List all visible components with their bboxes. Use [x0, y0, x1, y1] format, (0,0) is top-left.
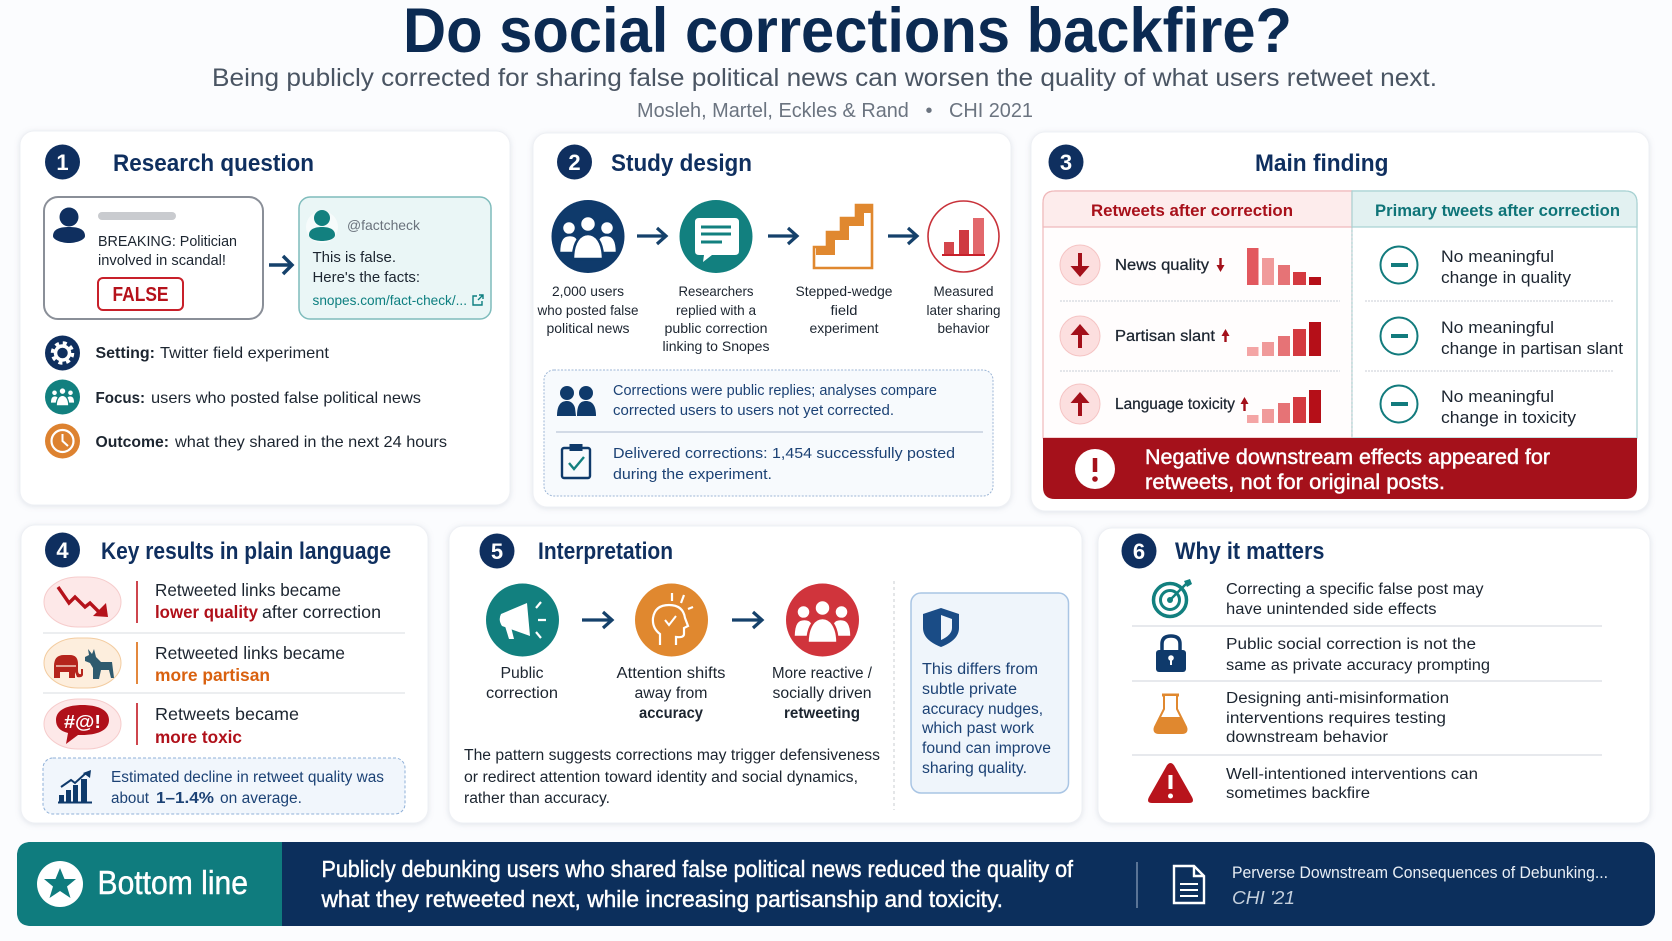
side note: private nudges: found can improve — [922, 740, 1051, 757]
step: users — [537, 200, 639, 336]
interpretation paragraph — [464, 747, 880, 807]
step: stepped wedge — [796, 205, 893, 336]
arrow — [768, 228, 797, 244]
step: public correction — [486, 584, 559, 702]
item: side effects: Correcting a specific false post may — [1226, 581, 1484, 598]
callout: estimated decline — [43, 758, 405, 814]
row: news quality: News quality — [1115, 257, 1209, 274]
fact-check reply card: snopes.com/fact-check/... — [312, 292, 467, 308]
item: private prompting: same as private accuracy prompting — [1226, 657, 1490, 674]
panel: key results — [21, 525, 428, 823]
step: attention shifts: accuracy — [639, 705, 703, 722]
item: backfire warning: sometimes backfire — [1226, 785, 1370, 802]
fact-check reply card: Here's the facts: — [312, 269, 420, 286]
step: measured sharing: behavior — [938, 320, 990, 336]
step: measured sharing: Measured — [934, 283, 994, 299]
step: stepped wedge: Stepped-wedge — [796, 283, 893, 299]
focus row — [45, 380, 421, 414]
step: reactive retweeting: retweeting — [784, 705, 860, 722]
no change: toxicity: No meaningful — [1441, 388, 1554, 406]
note box: corrected users to users not yet corrected. — [613, 403, 894, 419]
no change: partisan slant — [1380, 318, 1623, 358]
badge 2: 2 — [568, 150, 581, 175]
item: backfire warning: Well-intentioned interventions can — [1226, 766, 1478, 783]
paper citation — [1232, 863, 1608, 908]
result: more toxic: Retweets became — [155, 704, 299, 724]
side note: private nudges: sharing quality. — [922, 760, 1027, 777]
focus row: users who posted false political news — [151, 390, 421, 407]
result: more toxic — [44, 699, 299, 749]
authors and venue: Mosleh, Martel, Eckles & Rand • CHI 2021 — [637, 100, 1033, 122]
arrow — [732, 612, 762, 628]
result: more toxic: #@! — [64, 712, 101, 732]
icon: clipboard — [562, 444, 590, 478]
outcome row — [45, 424, 447, 458]
step: stepped wedge: experiment — [810, 320, 879, 336]
result: more partisan: Retweeted links became — [155, 643, 345, 663]
column header: primary tweets — [1352, 191, 1637, 227]
outcome row: what they shared in the next 24 hours — [174, 434, 447, 451]
step: attention shifts — [616, 584, 726, 722]
result: lower quality: after correction — [262, 602, 381, 622]
badge 3 — [1048, 144, 1084, 180]
step: measured sharing — [926, 201, 1000, 336]
step: researchers reply: public correction — [664, 320, 768, 336]
item: testing downstream behavior — [1154, 690, 1449, 746]
false stamp: FALSE — [112, 284, 168, 306]
step: attention shifts: Attention shifts — [616, 665, 726, 682]
panel: study design — [533, 133, 1011, 507]
item: side effects: have unintended side effects — [1226, 601, 1437, 618]
heading: study design: Study design — [611, 150, 752, 177]
step: users: who posted false — [537, 302, 639, 318]
red summary banner — [1043, 438, 1637, 499]
step: reactive retweeting — [772, 584, 873, 722]
badge 4: 4 — [56, 538, 69, 563]
arrow: post to reply — [269, 256, 292, 274]
comparison table — [1043, 191, 1637, 499]
subtitle: Being publicly corrected for sharing false political news can worsen the quality of what users retweet next. — [212, 64, 1437, 92]
item: testing downstream behavior: Designing anti-misinformation — [1226, 690, 1449, 707]
column header: retweets — [1043, 191, 1352, 227]
row: language toxicity: Language toxicity — [1115, 396, 1235, 413]
bottom line label: Bottom line — [98, 864, 248, 901]
side note: private nudges: which past work — [921, 720, 1034, 737]
result: more partisan: more partisan — [155, 665, 270, 685]
bottom line statement: Publicly debunking users who shared false political news reduced the quality of — [322, 856, 1074, 882]
step: reactive retweeting: socially driven — [772, 685, 872, 702]
bottom line banner — [17, 842, 1655, 926]
icon: people — [557, 386, 596, 416]
item: testing downstream behavior: downstream behavior — [1226, 729, 1388, 746]
note box: during the experiment. — [613, 467, 772, 483]
badge 2 — [557, 144, 592, 180]
focus row: Focus: — [96, 390, 145, 407]
note box: Delivered corrections: 1,454 successfully posted — [613, 446, 955, 462]
panel: research question — [20, 131, 510, 505]
no change: toxicity — [1380, 386, 1577, 427]
no change: quality: No meaningful — [1441, 248, 1554, 266]
heading: why it matters: Why it matters — [1175, 538, 1324, 565]
step: users: political news — [546, 320, 630, 336]
note box: Corrections were public replies; analyses compare — [613, 383, 937, 399]
badge 6: 6 — [1133, 539, 1145, 564]
setting row: Twitter field experiment — [160, 345, 330, 362]
step: public correction: Public — [500, 665, 544, 682]
badge 5 — [480, 534, 514, 568]
false stamp — [98, 278, 183, 310]
callout: estimated decline: 1–1.4% — [156, 790, 214, 807]
column header: primary tweets: Primary tweets after correction — [1375, 201, 1620, 220]
interpretation paragraph: or redirect attention toward identity and social dynamics, — [464, 769, 858, 786]
paper citation: CHI '21 — [1232, 888, 1295, 908]
step: public correction: correction — [486, 685, 558, 702]
side note: private nudges — [911, 593, 1068, 793]
callout: estimated decline: Estimated decline in retweet quality was — [111, 769, 384, 786]
result: more partisan — [44, 638, 345, 688]
step: researchers reply — [662, 200, 770, 354]
arrow — [637, 228, 666, 244]
bottom line statement — [321, 856, 1074, 912]
side note: private nudges: subtle private — [922, 681, 1017, 698]
item: backfire warning — [1148, 763, 1478, 803]
result: lower quality: lower quality — [155, 602, 258, 622]
panel: main finding — [1031, 132, 1649, 511]
step: attention shifts: away from — [634, 685, 708, 702]
row: news quality — [1060, 245, 1321, 285]
heading: main finding: Main finding — [1255, 150, 1388, 177]
false post card — [44, 197, 263, 319]
no change: partisan slant: change in partisan slant — [1441, 340, 1623, 358]
fact-check reply card: @factcheck — [347, 217, 421, 233]
row: language toxicity — [1060, 384, 1321, 424]
no change: partisan slant: No meaningful — [1441, 319, 1554, 337]
bottom line statement: what they retweeted next, while increasing partisanship and toxicity. — [321, 886, 1003, 912]
icon: document — [1174, 866, 1204, 903]
note box — [544, 370, 993, 496]
side note: private nudges: This differs from — [922, 661, 1038, 678]
item: private prompting — [1156, 636, 1490, 674]
item: side effects — [1154, 579, 1484, 618]
false post card: involved in scandal! — [98, 252, 226, 269]
item: testing downstream behavior: interventions requires testing — [1226, 710, 1446, 727]
callout: estimated decline: on average. — [220, 790, 302, 807]
result: lower quality: Retweeted links became — [155, 580, 341, 600]
setting row — [45, 336, 330, 370]
step: researchers reply: replied with a — [676, 302, 756, 318]
step: users: 2,000 users — [552, 283, 624, 299]
bottom line label — [17, 842, 282, 926]
panel: why it matters — [1098, 528, 1650, 823]
result: more toxic: more toxic — [155, 727, 242, 747]
paper citation: Perverse Downstream Consequences of Debunking... — [1232, 863, 1608, 882]
icon: rising chart — [58, 770, 92, 804]
interpretation paragraph: rather than accuracy. — [464, 790, 610, 807]
item: private prompting: Public social correction is not the — [1226, 636, 1476, 653]
arrow — [888, 228, 917, 244]
fact-check reply card: This is false. — [312, 249, 396, 266]
row: partisan slant: Partisan slant — [1115, 328, 1216, 345]
outcome row: Outcome: — [96, 434, 169, 451]
badge 3: 3 — [1060, 150, 1072, 175]
icon: shield — [923, 608, 959, 647]
badge 1: 1 — [56, 150, 69, 175]
result: lower quality — [44, 577, 381, 627]
fact-check reply card — [299, 197, 491, 319]
badge 1 — [45, 144, 80, 180]
step: reactive retweeting: More reactive / — [772, 665, 873, 682]
red summary banner: retweets, not for original posts. — [1145, 471, 1445, 494]
badge 4 — [45, 532, 80, 568]
false post card: BREAKING: Politician — [98, 233, 237, 250]
column header: retweets: Retweets after correction — [1091, 201, 1293, 220]
panel: interpretation — [449, 526, 1082, 823]
badge 6 — [1122, 534, 1156, 568]
side note: private nudges: accuracy nudges, — [922, 701, 1043, 718]
no change: quality: change in quality — [1441, 269, 1572, 287]
interpretation paragraph: The pattern suggests corrections may trigger defensiveness — [464, 747, 880, 764]
setting row: Setting: — [96, 345, 155, 362]
step: researchers reply: Researchers — [678, 283, 754, 299]
callout: estimated decline: about — [111, 790, 150, 807]
red summary banner: Negative downstream effects appeared for — [1145, 446, 1550, 469]
badge 5: 5 — [491, 539, 503, 564]
heading: key results: Key results in plain language — [101, 538, 391, 565]
step: stepped wedge: field — [830, 302, 858, 318]
step: measured sharing: later sharing — [926, 302, 1000, 318]
row: partisan slant — [1060, 316, 1321, 356]
no change: toxicity: change in toxicity — [1441, 409, 1577, 427]
step: researchers reply: linking to Snopes — [662, 338, 770, 354]
heading: research question: Research question — [113, 150, 314, 177]
arrow — [582, 612, 612, 628]
heading: interpretation: Interpretation — [538, 538, 673, 565]
no change: quality — [1380, 246, 1572, 287]
